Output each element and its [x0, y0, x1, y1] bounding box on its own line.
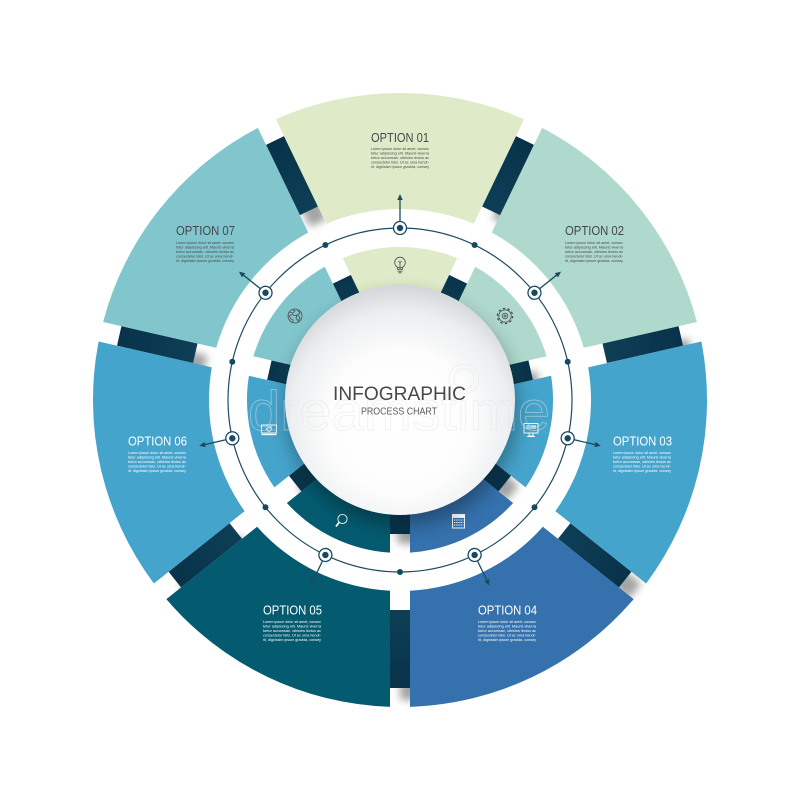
dark gap connectors	[117, 136, 683, 688]
heading: option 01: OPTION 01	[371, 131, 429, 145]
text block: option 01	[371, 147, 430, 169]
panel: option 03	[544, 318, 727, 589]
text block: option 01: Lorem ipsum dolor sit amet, consec	[371, 147, 429, 151]
arrow: node 06	[198, 430, 240, 452]
icon: magnifier	[336, 514, 347, 526]
watermark: dreamstime	[248, 379, 550, 442]
heading: option 06: OPTION 06	[128, 434, 187, 448]
small ring dots	[229, 242, 571, 575]
text block: option 01: rit, dignissim ipsum gravida, consey	[371, 165, 429, 169]
text block: option 07: tetur adipiscing elit. Mauris viverra	[176, 246, 235, 250]
inner segment 04	[393, 468, 518, 563]
arrow: node 07	[235, 266, 275, 302]
heading: option 03: OPTION 03	[613, 434, 672, 448]
icon: gear	[497, 308, 513, 324]
arrow: node 04	[466, 546, 495, 588]
text block: option 06: rit, dignissim ipsum gravida, consey	[128, 469, 186, 473]
heading: option 05: OPTION 05	[263, 604, 322, 618]
text block: option 02: tetur adipiscing elit. Mauris viverra	[565, 246, 624, 250]
text block: option 06: consectetur felis. Ut ac urna hendr-	[128, 464, 187, 468]
arrow: node 02	[525, 266, 565, 302]
icon: calendar	[452, 514, 464, 528]
text block: option 04	[478, 620, 537, 642]
inner segment 06	[238, 367, 312, 490]
title	[333, 383, 466, 418]
text block: option 07: Lorem ipsum dolor sit amet, consec	[176, 241, 234, 245]
panel: option 07	[83, 112, 340, 387]
panel: option 05	[155, 505, 435, 730]
text block: option 04: tetur adipiscing elit. Mauris viverra	[478, 624, 537, 628]
panel: option 04	[365, 505, 645, 730]
icon: banknote	[262, 425, 276, 434]
text block: option 04: tortor accumsan, ultricies lectus ac	[478, 629, 536, 633]
text block: option 03	[613, 451, 672, 473]
text block: option 05: tortor accumsan, ultricies lectus ac	[263, 629, 321, 633]
text block: option 01: tetur adipiscing elit. Mauris viverra	[371, 152, 430, 156]
text block: option 05: tetur adipiscing elit. Mauris viverra	[263, 624, 322, 628]
text block: option 07: consectetur felis. Ut ac urna hendr-	[176, 254, 235, 258]
inner segment 07	[245, 260, 355, 381]
text block: option 01: consectetur felis. Ut ac urna hendr-	[371, 160, 430, 164]
text block: option 03: consectetur felis. Ut ac urna hendr-	[613, 464, 672, 468]
arrow: node 01	[394, 194, 406, 234]
text block: option 02	[565, 241, 624, 263]
arrow: node 05	[305, 546, 334, 588]
text block: option 02: consectetur felis. Ut ac urna hendr-	[565, 254, 624, 258]
heading: option 04: OPTION 04	[478, 604, 537, 618]
heading: option 02: OPTION 02	[565, 224, 624, 238]
subtitle: PROCESS CHART	[361, 406, 437, 418]
text block: option 05: Lorem ipsum dolor sit amet, consec	[263, 620, 321, 624]
title: INFOGRAPHIC	[333, 383, 466, 405]
text block: option 03: Lorem ipsum dolor sit amet, consec	[613, 451, 671, 455]
sphere shadow	[286, 294, 518, 526]
text block: option 06: tetur adipiscing elit. Mauris viverra	[128, 456, 187, 460]
heading: option 07: OPTION 07	[176, 224, 235, 238]
text block: option 01: tortor accumsan, ultricies lectus ac	[371, 156, 429, 160]
inner segment 05	[282, 468, 407, 563]
panel: option 06	[73, 318, 256, 589]
inner segment 03	[488, 367, 562, 490]
text block: option 02: Lorem ipsum dolor sit amet, consec	[565, 241, 623, 245]
text block: option 05: consectetur felis. Ut ac urna hendr-	[263, 634, 322, 638]
gap shadows	[127, 148, 693, 700]
centre sphere	[285, 285, 515, 515]
text block: option 07: tortor accumsan, ultricies lectus ac	[176, 250, 234, 254]
ring line	[228, 228, 572, 572]
text block: option 02: rit, dignissim ipsum gravida, consey	[565, 259, 623, 263]
arrow: node 03	[560, 430, 602, 452]
panel: option 01	[276, 93, 524, 224]
text block: option 07: rit, dignissim ipsum gravida, consey	[176, 259, 234, 263]
text block: option 04: Lorem ipsum dolor sit amet, consec	[478, 620, 536, 624]
icon: globe	[288, 309, 302, 323]
text block: option 03: tetur adipiscing elit. Mauris viverra	[613, 456, 672, 460]
inner segment 01	[343, 247, 457, 297]
text block: option 07	[176, 241, 235, 263]
icon: monitor	[524, 424, 538, 436]
text block: option 04: consectetur felis. Ut ac urna hendr-	[478, 634, 537, 638]
text block: option 02: tortor accumsan, ultricies lectus ac	[565, 250, 623, 254]
icon: light bulb	[395, 257, 405, 273]
text block: option 06	[128, 451, 187, 473]
text block: option 06: tortor accumsan, ultricies lectus ac	[128, 460, 186, 464]
text block: option 03: rit, dignissim ipsum gravida, consey	[613, 469, 671, 473]
inner segment 02	[445, 260, 555, 381]
text block: option 05	[263, 620, 322, 642]
text block: option 05: rit, dignissim ipsum gravida, consey	[263, 638, 321, 642]
panel: option 02	[460, 112, 717, 387]
text block: option 04: rit, dignissim ipsum gravida, consey	[478, 638, 536, 642]
text block: option 03: tortor accumsan, ultricies lectus ac	[613, 460, 671, 464]
text block: option 06: Lorem ipsum dolor sit amet, consec	[128, 451, 186, 455]
